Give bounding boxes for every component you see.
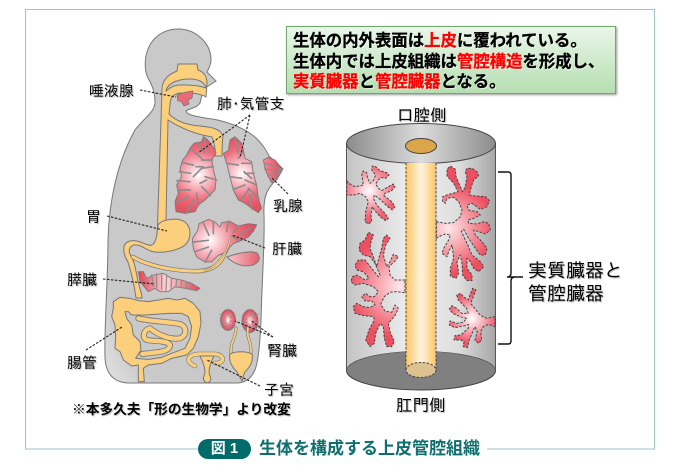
cylinder top face: [346, 124, 496, 164]
label: mammary gland: 乳腺: [273, 198, 303, 213]
gland lower right: [449, 288, 495, 348]
liver: [192, 219, 257, 271]
caption title: 生体を構成する上皮管腔組織: [259, 439, 480, 458]
tube exit: [406, 362, 436, 378]
label: uterus: 子宮: [264, 382, 294, 397]
salivary gland: [177, 91, 193, 106]
label: liver: 肝臓: [272, 241, 302, 256]
caption number: 図 1: [211, 440, 238, 457]
gall bladder: [227, 252, 259, 266]
epithelial tube cylinder: [346, 124, 496, 390]
right lung: [223, 137, 262, 213]
cylinder side: [346, 144, 496, 370]
callout box background: [286, 26, 616, 94]
label: anal side: 肛門側: [396, 396, 446, 413]
pancreas: [138, 272, 200, 292]
label: stomach: 胃: [86, 209, 101, 224]
cylinder bottom face: [346, 351, 496, 390]
kidneys: [220, 309, 258, 332]
label: pancreas: 膵臓: [67, 272, 97, 287]
source note: ※本多久夫「形の生物学」より改変: [72, 402, 291, 417]
gland upper right: [436, 166, 490, 281]
lumen opening: [406, 138, 436, 154]
label: parenchymal and tubular organs: 管腔臓器: [528, 284, 604, 303]
stomach and duodenum: [124, 219, 226, 298]
callout text: [293, 32, 604, 91]
callout text: 生体の内外表面は上皮に覆われている。: [293, 32, 587, 50]
label: salivary gland: 唾液腺: [89, 83, 134, 98]
bracket: [498, 172, 523, 344]
gland lower left: [351, 232, 405, 347]
body silhouette: [105, 29, 283, 383]
callout text: 生体内では上皮組織は管腔構造を形成し、: [293, 52, 604, 70]
uterus and ovaries: [189, 354, 223, 383]
leader lines: [86, 90, 288, 386]
gland upper left: [347, 166, 395, 224]
trachea and oesophagus: [157, 64, 223, 240]
left lung: [175, 137, 217, 213]
ureters and bladder: [230, 328, 252, 381]
caption pill background: [198, 439, 251, 459]
label: parenchymal and tubular organs: 実質臓器と: [528, 261, 623, 280]
label: parenchymal and tubular organs: [528, 261, 623, 303]
label: kidney: 腎臓: [267, 343, 297, 358]
label: lung and bronchi: 肺･気管支: [217, 96, 284, 111]
label: intestine: 腸管: [67, 355, 97, 370]
intestines: [112, 297, 201, 382]
callout text: 実質臓器と管腔臓器となる。: [293, 73, 506, 91]
mammary gland: [263, 157, 283, 183]
anatomical body: [86, 29, 288, 386]
label: oral side: 口腔側: [397, 106, 446, 123]
central lumen tube: [406, 163, 436, 370]
